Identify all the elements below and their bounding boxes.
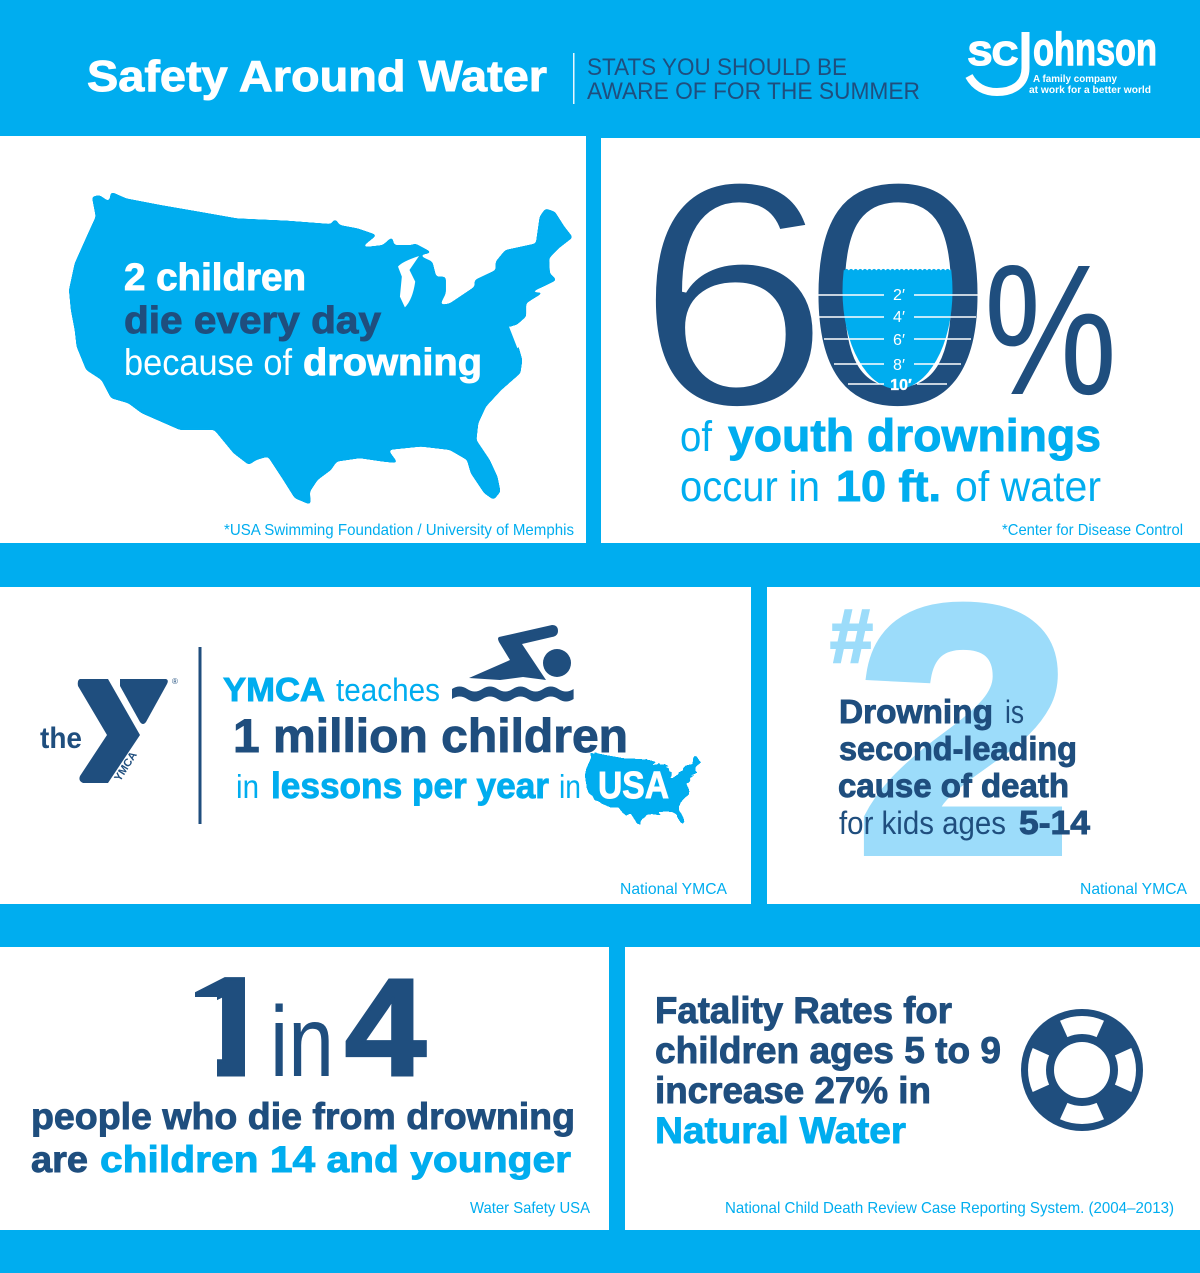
big number 60 with water gauge	[656, 184, 1112, 406]
panel: 2 children die every day	[0, 136, 586, 543]
statement text: for kids ages	[839, 805, 1006, 841]
source note: *Center for Disease Control	[1002, 522, 1183, 539]
statement text: teaches	[336, 672, 440, 708]
header divider	[573, 53, 574, 104]
statement text: are	[31, 1139, 88, 1180]
statement text: because of	[124, 342, 293, 383]
big #2: #	[830, 594, 873, 679]
statement text: Drowning	[839, 693, 993, 730]
statement text: 2 children	[124, 257, 306, 299]
source note: *USA Swimming Foundation / University of Memphis	[224, 522, 574, 539]
subtitle: AWARE OF FOR THE SUMMER	[587, 78, 920, 105]
logo: the Y: YMCA	[112, 750, 140, 784]
statement text: increase 27% in	[655, 1070, 931, 1111]
statement text: YMCA	[223, 671, 325, 708]
source note: National YMCA	[620, 881, 727, 898]
icon: swimmer	[452, 625, 574, 702]
header band	[87, 23, 1157, 105]
logo: the Y	[40, 677, 178, 784]
source note: National Child Death Review Case Reporting System. (2004–2013)	[725, 1200, 1174, 1217]
logo: SC Johnson: at work for a better world	[1029, 84, 1151, 96]
logo: the Y: the	[40, 722, 82, 755]
statement text: Fatality Rates for	[655, 990, 952, 1031]
logo: SC Johnson	[968, 23, 1157, 96]
statement text	[124, 257, 482, 384]
source note: National YMCA	[1080, 881, 1187, 898]
logo: SC Johnson: ohnson	[1033, 23, 1157, 75]
statement text	[680, 410, 1101, 511]
statement text: in	[236, 768, 259, 805]
map: small USA with label	[585, 752, 701, 825]
depth labels	[890, 287, 912, 394]
depth labels: 8′	[893, 357, 905, 374]
big 1 in 4: in	[270, 986, 334, 1098]
statement text: 1 million children	[233, 709, 628, 762]
statement text: occur in	[680, 463, 820, 511]
map: United States	[69, 192, 573, 505]
statement text: people who die from drowning	[31, 1096, 575, 1137]
statement text: 10 ft.	[836, 462, 941, 511]
big number 60 with water gauge: 0	[803, 115, 993, 473]
big number 60 with water gauge: %	[984, 227, 1117, 434]
statement text: cause of death	[838, 767, 1069, 804]
statement text: is	[1005, 694, 1024, 730]
statement text	[223, 671, 628, 806]
statement text: of	[680, 413, 713, 461]
statement text: children ages 5 to 9	[655, 1030, 1001, 1071]
panel: number 2 cause	[767, 535, 1200, 926]
logo: SC Johnson: SC	[968, 35, 1018, 72]
big 1 in 4	[195, 977, 427, 1076]
panel: 60 percent	[601, 115, 1200, 543]
depth labels: 4′	[893, 309, 905, 326]
statement text: children 14 and younger	[100, 1139, 571, 1180]
statement text: die every day	[124, 300, 381, 342]
statement text: drowning	[303, 342, 482, 384]
big #2: 2	[856, 535, 1072, 926]
big number 60 with water gauge: 6	[636, 115, 830, 473]
big 1 in 4: 1	[182, 948, 282, 1105]
divider	[198, 647, 202, 824]
statement text: in	[559, 768, 581, 805]
statement text: lessons per year	[271, 765, 549, 806]
icon: life ring	[1021, 1009, 1143, 1131]
subtitle	[587, 54, 920, 105]
statement text: of water	[955, 463, 1101, 511]
depth lines	[817, 295, 978, 384]
statement text	[31, 1096, 575, 1180]
statement text: youth drownings	[728, 410, 1101, 461]
logo: SC Johnson: A family company	[1033, 73, 1117, 85]
subtitle: STATS YOU SHOULD BE	[587, 54, 847, 81]
statement text: Natural Water	[655, 1110, 906, 1151]
depth labels: 6′	[893, 332, 905, 349]
statement text	[838, 693, 1091, 841]
map: small USA with label: USA	[598, 765, 669, 807]
panel: 1 in 4	[0, 947, 609, 1230]
statement text: second-leading	[839, 730, 1077, 767]
depth labels: 2′	[893, 287, 905, 304]
logo: the Y: ®	[172, 677, 178, 686]
big 1 in 4: 4	[345, 951, 426, 1105]
statement text: 5-14	[1019, 804, 1091, 841]
panel: YMCA	[0, 587, 751, 904]
title: Safety Around Water	[87, 52, 547, 101]
depth labels: 10′	[890, 377, 912, 394]
statement text	[655, 990, 1001, 1151]
source note: Water Safety USA	[470, 1200, 590, 1217]
panel: fatality rates	[625, 947, 1200, 1230]
